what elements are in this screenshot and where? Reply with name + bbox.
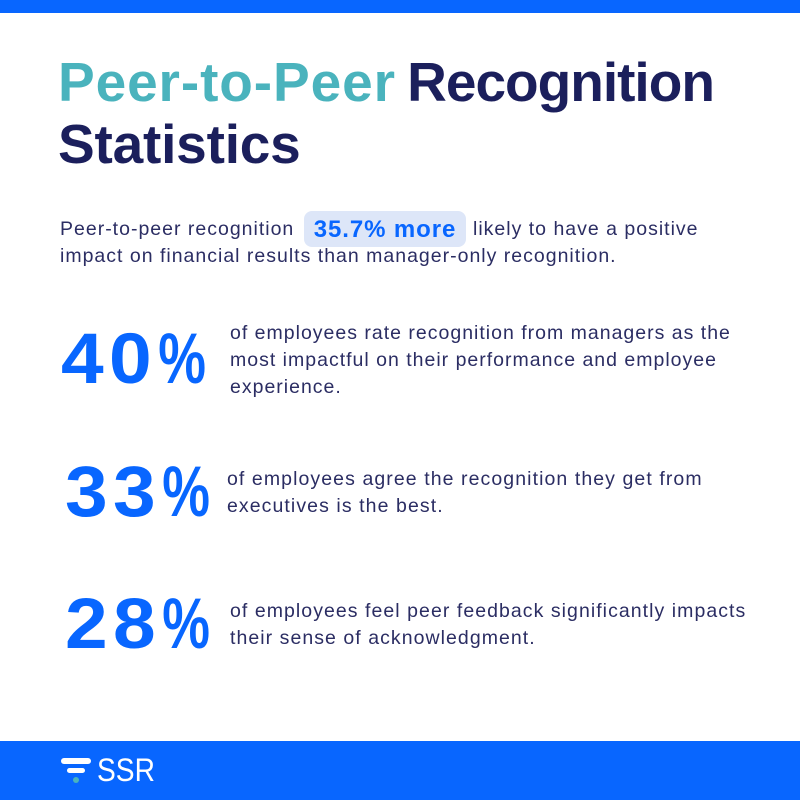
footer bar <box>0 741 800 800</box>
stat: 40%: 40 <box>61 320 157 399</box>
highlight: 35.7% more <box>304 211 466 247</box>
stat text: 33% <box>227 468 703 517</box>
intro text: Peer-to-peer recognition <box>60 218 294 240</box>
intro text continuation: likely to have a positive <box>473 218 699 240</box>
stat: 33%: % <box>162 453 210 532</box>
top bar <box>0 0 800 13</box>
intro text: impact on financial results than manager-only recognition. <box>60 245 617 267</box>
highlight: 35.7% more: 35.7% more <box>314 216 456 243</box>
stat text: 28%: of employees feel peer feedback significantly impacts <box>230 600 746 622</box>
stat: 40% <box>61 320 206 399</box>
stat text: 28% <box>230 600 746 649</box>
stat: 33% <box>65 453 210 532</box>
stat: 28% <box>65 585 210 664</box>
stat text: 40%: experience. <box>230 376 342 398</box>
title <box>58 51 714 175</box>
title: Peer-to-Peer Recognition <box>58 51 714 113</box>
stat: 40%: % <box>158 320 206 399</box>
stat: 33%: 33 <box>65 453 161 532</box>
icon: SSR logo mark <box>61 758 91 783</box>
stat text: 40%: most impactful on their performance and employee <box>230 349 717 371</box>
stat text: 40%: of employees rate recognition from managers as the <box>230 322 731 344</box>
stat: 28%: 28 <box>65 585 161 664</box>
title: Statistics <box>58 113 301 175</box>
intro text <box>60 218 617 267</box>
stat text: 33%: of employees agree the recognition they get from <box>227 468 703 490</box>
stat text: 28%: their sense of acknowledgment. <box>230 627 536 649</box>
logo text: SSR <box>97 752 155 788</box>
stat text: 40% <box>230 322 731 398</box>
stat: 28%: % <box>162 585 210 664</box>
stat text: 33%: executives is the best. <box>227 495 444 517</box>
